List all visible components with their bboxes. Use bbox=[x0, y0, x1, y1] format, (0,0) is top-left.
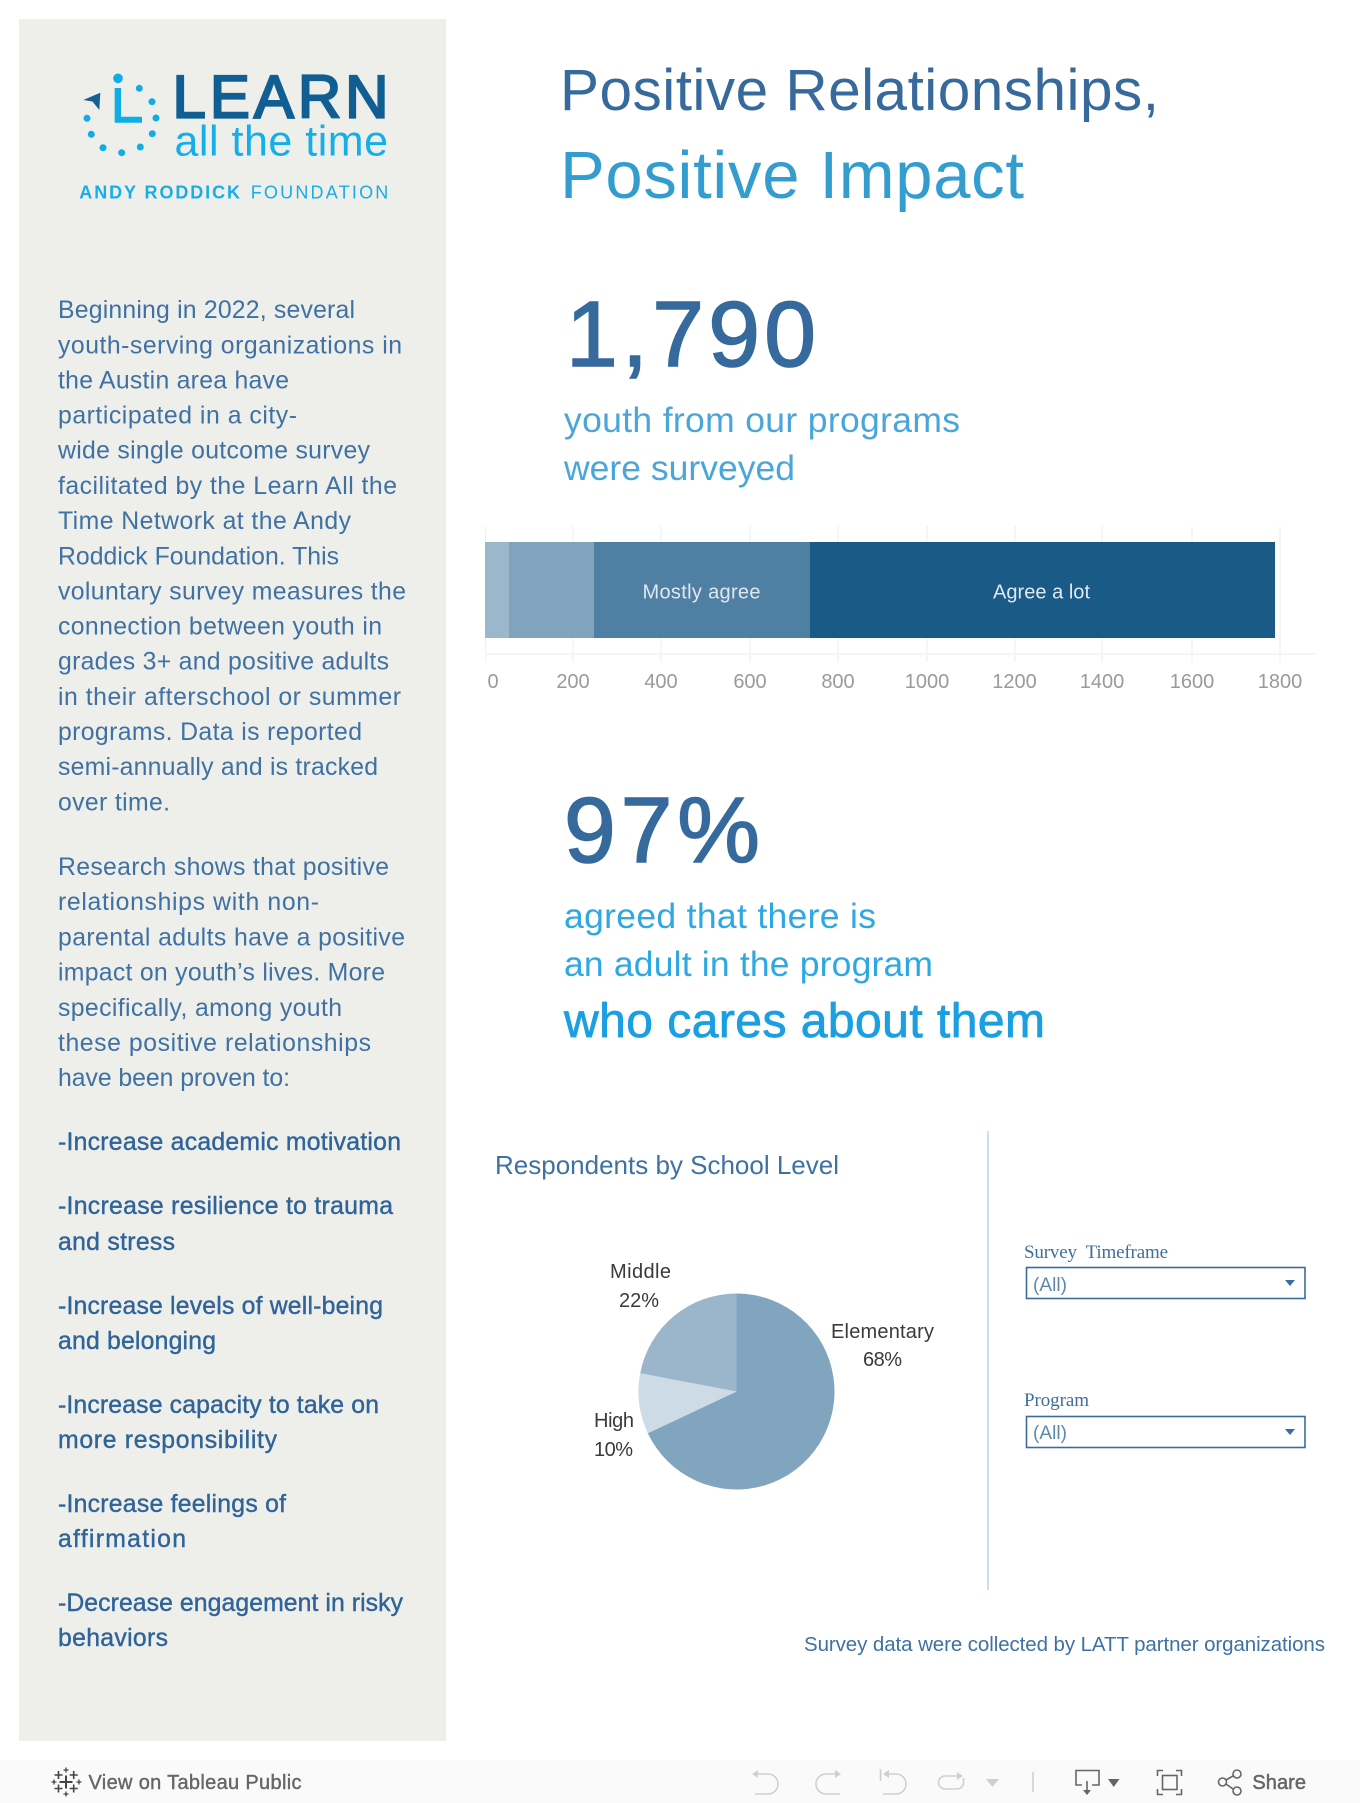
list: proven benefits: -Increase capacity to take on bbox=[58, 1392, 379, 1419]
text block: research: Research shows that positive bbox=[58, 854, 389, 881]
text block: research: relationships with non- bbox=[58, 889, 319, 916]
axis labels: 800 bbox=[821, 671, 855, 693]
text block: survey intro: Beginning in 2022, several bbox=[58, 297, 355, 324]
stat: adult who cares bbox=[563, 778, 1045, 1048]
filter: program: (All) bbox=[1033, 1423, 1067, 1444]
heading: respondents by school level: Respondents by School Level bbox=[495, 1150, 839, 1180]
axis labels: 600 bbox=[733, 671, 767, 693]
text block: survey intro: youth-serving organizations in bbox=[58, 332, 402, 359]
stat: adult who cares: who cares about them bbox=[563, 995, 1045, 1048]
text block: survey intro: participated in a city- bbox=[58, 402, 297, 430]
bar chart: agreement responses: Agree a lot bbox=[993, 582, 1090, 604]
axis labels: 1400 bbox=[1080, 671, 1124, 693]
icon: redo bbox=[816, 1770, 841, 1794]
list: proven benefits: affirmation bbox=[58, 1526, 186, 1553]
title: Positive Impact bbox=[560, 138, 1024, 213]
title: Positive Relationships, bbox=[560, 58, 1159, 123]
axis labels: 1000 bbox=[905, 671, 949, 693]
list: proven benefits: -Increase resilience to trauma bbox=[58, 1193, 393, 1220]
icon: clock of dots with L bbox=[83, 74, 160, 156]
bar segments bbox=[485, 542, 1275, 638]
text block: survey intro: programs. Data is reported bbox=[58, 719, 362, 746]
axis labels: 400 bbox=[644, 671, 678, 693]
axis labels: 1600 bbox=[1170, 671, 1214, 693]
pie chart: school level: High bbox=[594, 1410, 634, 1432]
axis labels bbox=[487, 671, 1302, 693]
stat: adult who cares: 97% bbox=[564, 778, 760, 882]
axis labels: 0 bbox=[487, 671, 499, 693]
text block: survey intro: wide single outcome survey bbox=[57, 438, 371, 465]
icon: share bbox=[1218, 1770, 1241, 1795]
icon: fullscreen bbox=[1158, 1770, 1182, 1794]
stat: youth surveyed: youth from our programs bbox=[564, 400, 960, 440]
text block: survey intro: Time Network at the Andy bbox=[58, 508, 352, 535]
bar chart: agreement responses bbox=[485, 526, 1315, 693]
axis labels: 1800 bbox=[1258, 671, 1302, 693]
list: proven benefits: and stress bbox=[58, 1229, 175, 1256]
pie chart: school level: 68% bbox=[863, 1349, 902, 1371]
text block: research: have been proven to: bbox=[58, 1065, 290, 1092]
text block: research: impact on youth’s lives. More bbox=[58, 960, 385, 987]
filter: survey timeframe: Survey Timeframe bbox=[1024, 1242, 1168, 1263]
panel: sidebar bbox=[19, 19, 446, 1741]
pie chart: school level: 10% bbox=[594, 1439, 633, 1461]
logo: Learn All the Time: LEARN bbox=[172, 63, 388, 130]
icon: revert bbox=[880, 1769, 906, 1794]
logo: Learn All the Time bbox=[79, 63, 389, 202]
list: proven benefits: -Increase levels of well-being bbox=[58, 1293, 383, 1320]
text block: survey intro: voluntary survey measures the bbox=[58, 578, 406, 605]
text block: survey intro: semi-annually and is tracked bbox=[58, 754, 378, 781]
logo: Learn All the Time: all the time bbox=[174, 118, 388, 166]
text block: survey intro: in their afterschool or summer bbox=[58, 684, 401, 711]
pie chart: school level: Middle bbox=[610, 1261, 671, 1283]
filter: survey timeframe bbox=[1024, 1242, 1305, 1298]
pie chart: school level bbox=[594, 1261, 934, 1489]
toolbar bbox=[0, 1760, 1360, 1803]
pie chart: school level: 22% bbox=[619, 1290, 659, 1312]
list: proven benefits: -Decrease engagement in risky bbox=[58, 1590, 404, 1617]
axis labels: 1200 bbox=[992, 671, 1037, 693]
footnote: Survey data were collected by LATT partner organizations bbox=[804, 1633, 1325, 1656]
list: proven benefits: behaviors bbox=[58, 1625, 168, 1652]
logo: Learn All the Time: FOUNDATION bbox=[251, 182, 388, 202]
bar chart: agreement responses: Mostly agree bbox=[642, 582, 760, 604]
list: proven benefits: -Increase feelings of bbox=[58, 1491, 286, 1518]
icon: download bbox=[1076, 1770, 1120, 1795]
text block: research bbox=[58, 854, 405, 1092]
pie chart: school level: Elementary bbox=[831, 1321, 934, 1343]
list: proven benefits: more responsibility bbox=[58, 1427, 278, 1454]
text block: survey intro: over time. bbox=[58, 789, 170, 816]
stat: adult who cares: agreed that there is bbox=[564, 896, 876, 936]
stat: youth surveyed: were surveyed bbox=[563, 448, 795, 488]
title bbox=[560, 58, 1159, 213]
axis labels: 200 bbox=[556, 671, 590, 693]
text block: survey intro: connection between youth in bbox=[58, 614, 382, 640]
toolbar: View on Tableau Public bbox=[88, 1772, 302, 1794]
text block: survey intro: the Austin area have bbox=[58, 367, 289, 394]
text block: research: parental adults have a positive bbox=[58, 924, 405, 951]
list: proven benefits: and belonging bbox=[58, 1328, 216, 1355]
text block: survey intro: grades 3+ and positive adults bbox=[58, 649, 389, 676]
filter: program: Program bbox=[1024, 1390, 1089, 1411]
list: proven benefits bbox=[58, 1129, 404, 1652]
stat: adult who cares: an adult in the program bbox=[564, 944, 933, 984]
text block: survey intro: Roddick Foundation. This bbox=[58, 543, 339, 570]
list: proven benefits: -Increase academic motivation bbox=[58, 1129, 401, 1156]
filter: survey timeframe: (All) bbox=[1033, 1275, 1067, 1296]
stat: youth surveyed bbox=[563, 282, 960, 488]
filter: program bbox=[1024, 1390, 1305, 1448]
text block: research: these positive relationships bbox=[58, 1030, 371, 1057]
text block: survey intro bbox=[57, 297, 406, 816]
logo: Learn All the Time: ANDY RODDICK bbox=[79, 182, 240, 202]
icon: undo bbox=[752, 1770, 778, 1794]
text block: research: specifically, among youth bbox=[58, 995, 342, 1022]
text block: survey intro: facilitated by the Learn All the bbox=[58, 473, 397, 500]
toolbar: Share bbox=[1252, 1772, 1306, 1794]
icon: tableau logo bbox=[52, 1768, 82, 1796]
stat: youth surveyed: 1,790 bbox=[566, 282, 816, 386]
icon: refresh bbox=[939, 1772, 964, 1789]
